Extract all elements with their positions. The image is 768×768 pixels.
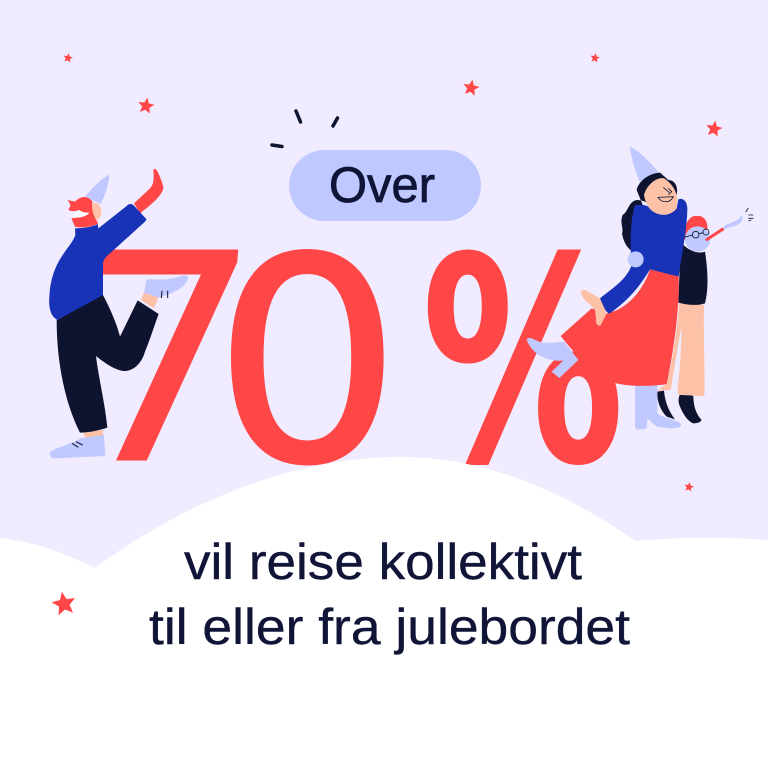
party hat [85, 175, 109, 204]
woman's sweater [600, 199, 687, 313]
hand on knee [581, 290, 607, 326]
man's shoes [657, 391, 702, 423]
caption [149, 534, 630, 655]
pill: Over: Over [329, 157, 435, 213]
woman's kicking boot [527, 338, 578, 378]
party horn [705, 208, 753, 241]
man's hair [683, 216, 707, 240]
big number: 70 %: % [422, 198, 624, 527]
ankles [83, 293, 158, 438]
woman's skirt [561, 269, 679, 386]
trousers [57, 295, 159, 433]
caption: vil reise kollektivt [184, 534, 582, 590]
party hat [630, 147, 659, 181]
sweater [49, 204, 147, 320]
burst lines [272, 111, 338, 146]
stars [50, 52, 723, 616]
woman's boot, standing [635, 385, 681, 429]
big number: 70 % [59, 193, 624, 529]
caption: til eller fra julebordet [149, 599, 630, 655]
head and beard [67, 197, 101, 227]
man's face with glasses [684, 226, 710, 252]
woman's hair [621, 173, 677, 251]
upper shoe [144, 276, 188, 298]
big number: 70 %: 7 [59, 193, 266, 529]
man's trousers [657, 303, 704, 396]
man's hand pompom [628, 251, 644, 267]
big number: 70 %: 0 [213, 199, 402, 527]
shoe laces [72, 291, 168, 447]
lower shoe [50, 435, 105, 458]
left dancing figure [49, 169, 188, 458]
white snow hill [0, 457, 768, 768]
woman's face [644, 178, 677, 215]
raised foot [134, 169, 163, 213]
pill: Over [289, 150, 481, 221]
man's top [678, 242, 707, 305]
right couple [527, 147, 753, 429]
